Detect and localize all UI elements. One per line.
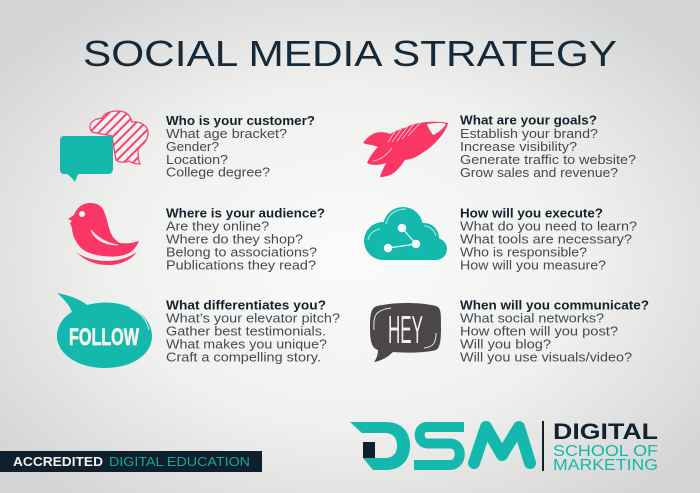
logo text: school of: SCHOOL OF [553, 443, 658, 460]
text: what differentiates you: Gather best testimonials. [166, 324, 326, 338]
icon: follow speech bubble [57, 293, 152, 368]
text: who is your customer: What age bracket? [166, 126, 287, 141]
logo text: digital: DIGITAL [553, 419, 658, 444]
title: SOCIAL MEDIA STRATEGY [83, 33, 617, 74]
text: how will you execute: How will you measure? [460, 258, 606, 272]
text: who is your customer: Who is your customer? [166, 113, 315, 128]
logo mark: DSM letters [350, 422, 530, 470]
text: what differentiates you [166, 298, 340, 364]
text: where is your audience: Where do they shop? [166, 232, 303, 246]
icon: follow speech bubble: FOLLOW [69, 324, 139, 351]
icon: rocket [363, 122, 448, 177]
text: what are your goals: Grow sales and revenue? [460, 165, 618, 180]
banner: accredited digital education: DIGITAL EDUCATION [109, 454, 250, 469]
text: what are your goals: Establish your brand? [460, 126, 598, 141]
text: what differentiates you: What makes you unique? [166, 336, 327, 352]
text: what are your goals: Generate traffic to website? [460, 152, 636, 167]
text: when will you communicate: Will you use visuals/video? [460, 350, 632, 364]
text: where is your audience: Publications they read? [166, 258, 316, 272]
text: how will you execute [460, 206, 637, 272]
icon: cloud network [364, 207, 447, 260]
banner: accredited digital education [0, 451, 262, 472]
text: when will you communicate: How often will you post? [460, 324, 618, 338]
text: what differentiates you: Craft a compelling story. [166, 350, 321, 364]
text: what are your goals: Increase visibility? [460, 139, 577, 154]
text: who is your customer: College degree? [166, 164, 270, 180]
text: when will you communicate: When will you communicate? [460, 298, 649, 312]
text: where is your audience: Are they online? [166, 218, 269, 234]
text: where is your audience: Belong to associations? [166, 244, 317, 260]
text: who is your customer: Gender? [166, 139, 219, 154]
text: what differentiates you: What’s your elevator pitch? [166, 310, 340, 326]
text: what differentiates you: What differentiates you? [166, 298, 326, 312]
logo: DSM digital school of marketing [350, 419, 658, 474]
text: where is your audience: Where is your audience? [166, 206, 325, 220]
icon: speech bubbles [60, 111, 148, 182]
text: how will you execute: Who is responsible? [460, 244, 587, 260]
text: who is your customer: Location? [166, 152, 228, 167]
text: when will you communicate [460, 298, 649, 364]
text: when will you communicate: What social networks? [460, 310, 604, 326]
logo mark: dark square [363, 442, 375, 458]
banner: accredited digital education: ACCREDITED [13, 454, 103, 469]
text: what are your goals [460, 112, 636, 180]
text: where is your audience [166, 206, 325, 272]
icon: bird [68, 203, 139, 265]
icon: hey speech bubble [370, 303, 441, 362]
text: what are your goals: What are your goals? [460, 112, 597, 128]
logo text: marketing: MARKETING [553, 457, 658, 474]
text: how will you execute: How will you execute? [460, 206, 603, 220]
text: who is your customer [166, 113, 315, 180]
text: how will you execute: What tools are necessary? [460, 232, 632, 246]
icon: hey speech bubble: HEY [388, 309, 423, 352]
text: when will you communicate: Will you blog? [460, 336, 551, 352]
divider bar [542, 421, 544, 471]
text: how will you execute: What do you need to learn? [460, 218, 637, 234]
